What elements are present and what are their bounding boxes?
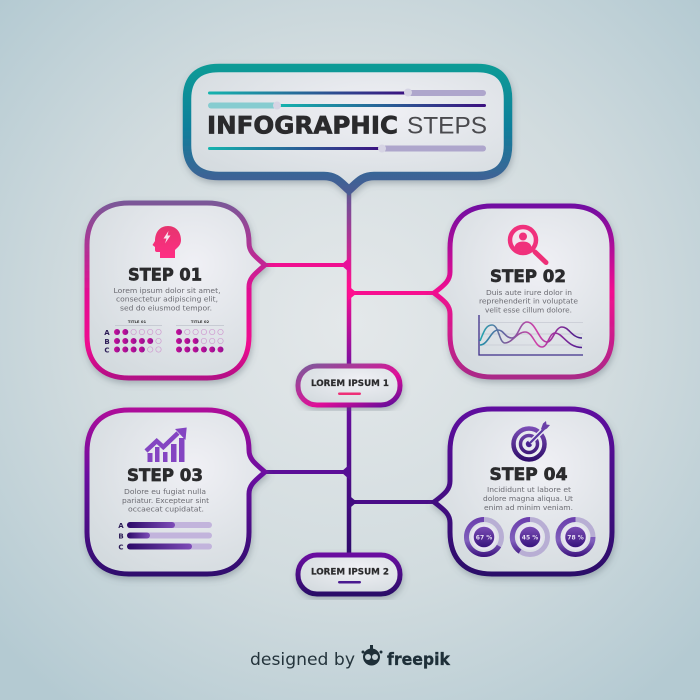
donut: 67 percent — [466, 520, 502, 554]
body text — [122, 488, 209, 514]
dot table: TITLE 02 — [191, 319, 209, 324]
pill: lorem ipsum 1 — [298, 366, 400, 405]
pill label: LOREM IPSUM 1 — [311, 378, 389, 388]
icon: target — [514, 421, 550, 460]
body text: consectetur adipiscing elit, — [116, 296, 218, 304]
panel: step 04 — [434, 409, 612, 574]
body text: occaecat cupidatat. — [128, 506, 204, 514]
body text: Lorem ipsum dolor sit amet, — [114, 287, 220, 295]
panel: step 01 — [87, 203, 265, 378]
body text: Incididunt ut labore et — [487, 486, 571, 494]
body text — [114, 287, 220, 312]
credit text: designed by — [250, 650, 355, 670]
dot table: B — [104, 338, 110, 346]
body text: Duis aute irure dolor in — [486, 289, 572, 297]
slider 2 — [208, 102, 486, 110]
donut: 45 percent — [512, 519, 548, 554]
body text: dolore magna aliqua. Ut — [483, 495, 573, 503]
donut: 78 percent: 78 % — [567, 534, 584, 541]
body text: reprehenderit in voluptate — [479, 298, 578, 306]
connector: upper trunk and branches — [262, 188, 436, 366]
bar chart: B — [118, 532, 124, 540]
donut: 67 percent: 67 % — [476, 534, 492, 541]
dot table: TITLE 01 — [128, 319, 146, 324]
brand text: freepik — [387, 650, 451, 670]
donut: 78 percent — [558, 520, 593, 554]
body text: sed do eiusmod tempor. — [120, 304, 212, 312]
icon: growth chart — [146, 428, 187, 462]
heading: STEP 03 — [127, 466, 203, 485]
pill label: LOREM IPSUM 2 — [311, 566, 389, 576]
body text — [483, 486, 573, 512]
line chart — [479, 315, 583, 355]
donut: 45 percent: 45 % — [522, 534, 538, 541]
pill accent — [338, 581, 361, 584]
pill: lorem ipsum 2 — [298, 555, 400, 594]
bar chart: C — [118, 544, 124, 552]
body text: Dolore eu fugiat nulla — [124, 488, 206, 496]
icon: magnifier with person — [510, 227, 546, 262]
dot table — [104, 319, 224, 354]
title text light: STEPS — [407, 112, 487, 140]
slider 1 — [208, 88, 486, 96]
heading: STEP 02 — [490, 267, 566, 286]
pill accent — [338, 392, 361, 395]
title bubble — [187, 68, 508, 190]
heading: STEP 04 — [490, 465, 568, 484]
connector: lower trunk and branches — [262, 405, 436, 555]
footer: credit — [250, 645, 451, 670]
title text: INFOGRAPHIC — [207, 112, 398, 140]
icon: freepik mascot — [362, 645, 382, 666]
icon: head with bolt — [152, 226, 181, 258]
dot table: A — [104, 329, 110, 337]
body text: enim ad minim veniam. — [484, 504, 573, 512]
body text — [479, 289, 578, 314]
panel: step 02 — [434, 206, 612, 377]
bar chart: A — [118, 522, 124, 530]
body text: pariatur. Excepteur sint — [122, 497, 209, 505]
panel: step 03 — [87, 410, 265, 574]
slider 3 — [208, 144, 486, 152]
bar chart — [118, 522, 212, 552]
body text: velit esse cillum dolore. — [485, 306, 572, 314]
dot table: C — [104, 346, 110, 354]
heading: STEP 01 — [128, 266, 202, 284]
